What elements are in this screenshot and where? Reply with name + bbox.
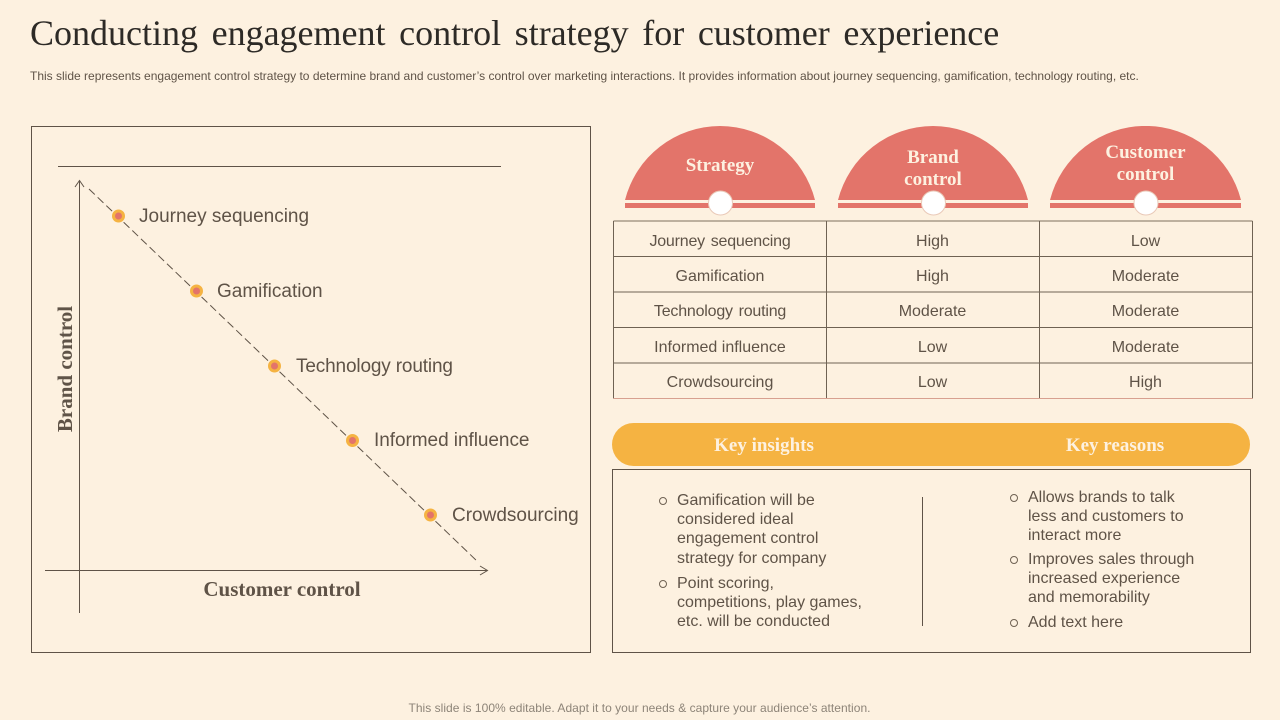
bullet: add text: Add text here: [1028, 614, 1123, 631]
bullet: gamification insight: engagement control: [677, 530, 818, 547]
row: Crowdsourcing: Low: [918, 374, 947, 391]
bullet: point scoring insight: [659, 575, 862, 630]
bullet: improves sales: and memorability: [1028, 589, 1150, 606]
y axis label: Brand control: [53, 306, 77, 432]
row: Technology routing: Technology routing: [654, 303, 786, 320]
row: Informed influence: Moderate: [1112, 339, 1179, 356]
header: Strategy: Strategy: [686, 155, 754, 176]
label: Crowdsourcing: Crowdsourcing: [452, 505, 579, 526]
bullet: allows brands: less and customers to: [1028, 508, 1184, 525]
row: Crowdsourcing: High: [1129, 374, 1162, 391]
bullet: improves sales: [1010, 551, 1194, 606]
banner: key insights and key reasons: [612, 423, 1250, 466]
label: Informed influence: Informed influence: [374, 430, 529, 451]
bullet: gamification insight: strategy for company: [677, 550, 826, 567]
header: Customer control: [1050, 126, 1241, 216]
heading: Key reasons: Key reasons: [1066, 435, 1164, 456]
row: Gamification: [676, 268, 1179, 285]
text: key reasons list: [1010, 489, 1194, 631]
row: Journey sequencing: [649, 233, 1160, 250]
subtitle: This slide represents engagement control strategy to determine brand and customer’s control over marketing interactions. It provides information about journey sequencing, gamification, technology routing, etc.: [30, 69, 1139, 83]
chart: control diagonal: [31, 126, 591, 653]
bullet: improves sales: increased experience: [1028, 570, 1180, 587]
bullet: point scoring insight: Point scoring,: [677, 575, 774, 592]
bullet: allows brands: Allows brands to talk: [1028, 489, 1175, 506]
row: Crowdsourcing: Crowdsourcing: [667, 374, 773, 391]
bullet: point scoring insight: etc. will be conducted: [677, 613, 830, 630]
footer note: This slide is 100% editable. Adapt it to your needs & capture your audience’s attention.: [408, 701, 871, 715]
header: Customer control: Customer: [1105, 142, 1186, 163]
row: Journey sequencing: High: [916, 233, 949, 250]
bullet: improves sales: Improves sales through: [1028, 551, 1194, 568]
label: Technology routing: Technology routing: [296, 356, 453, 377]
x axis label: Customer control: [203, 577, 361, 601]
row: Technology routing: Moderate: [899, 303, 966, 320]
label: Gamification: Gamification: [217, 281, 323, 302]
bullet: allows brands: [1010, 489, 1184, 544]
header: Strategy: [625, 126, 815, 216]
title: Conducting engagement control strategy for customer experience: [30, 13, 999, 53]
bullet: point scoring insight: competitions, play games,: [677, 594, 862, 611]
label: Journey sequencing: Journey sequencing: [139, 206, 309, 227]
divider: [922, 497, 923, 626]
panel: brand vs customer control chart: [31, 126, 591, 653]
row: Crowdsourcing: [667, 374, 1162, 391]
bullet: allows brands: interact more: [1028, 527, 1121, 544]
bullet: gamification insight: Gamification will be: [677, 492, 815, 509]
row: Technology routing: [654, 303, 1179, 320]
row: Technology routing: Moderate: [1112, 303, 1179, 320]
text: key insights list: [659, 492, 862, 630]
row: Gamification: High: [916, 268, 949, 285]
row: Journey sequencing: Journey sequencing: [649, 233, 791, 250]
row: Informed influence: Informed influence: [654, 339, 786, 356]
row: Informed influence: [654, 339, 1179, 356]
bullet: gamification insight: [659, 492, 826, 567]
header: Customer control: control: [1117, 164, 1174, 185]
header: Brand control: Brand: [907, 147, 959, 168]
row: Gamification: Moderate: [1112, 268, 1179, 285]
row: Gamification: Gamification: [676, 268, 764, 285]
bullet: gamification insight: considered ideal: [677, 511, 794, 528]
header: Brand control: control: [904, 169, 962, 190]
table: strategy levels: [613, 220, 1253, 399]
row: Journey sequencing: Low: [1131, 233, 1160, 250]
row: Informed influence: Low: [918, 339, 947, 356]
heading: Key insights: Key insights: [714, 435, 814, 456]
panel: insights and reasons: [612, 469, 1251, 653]
header: Brand control: [838, 126, 1028, 216]
